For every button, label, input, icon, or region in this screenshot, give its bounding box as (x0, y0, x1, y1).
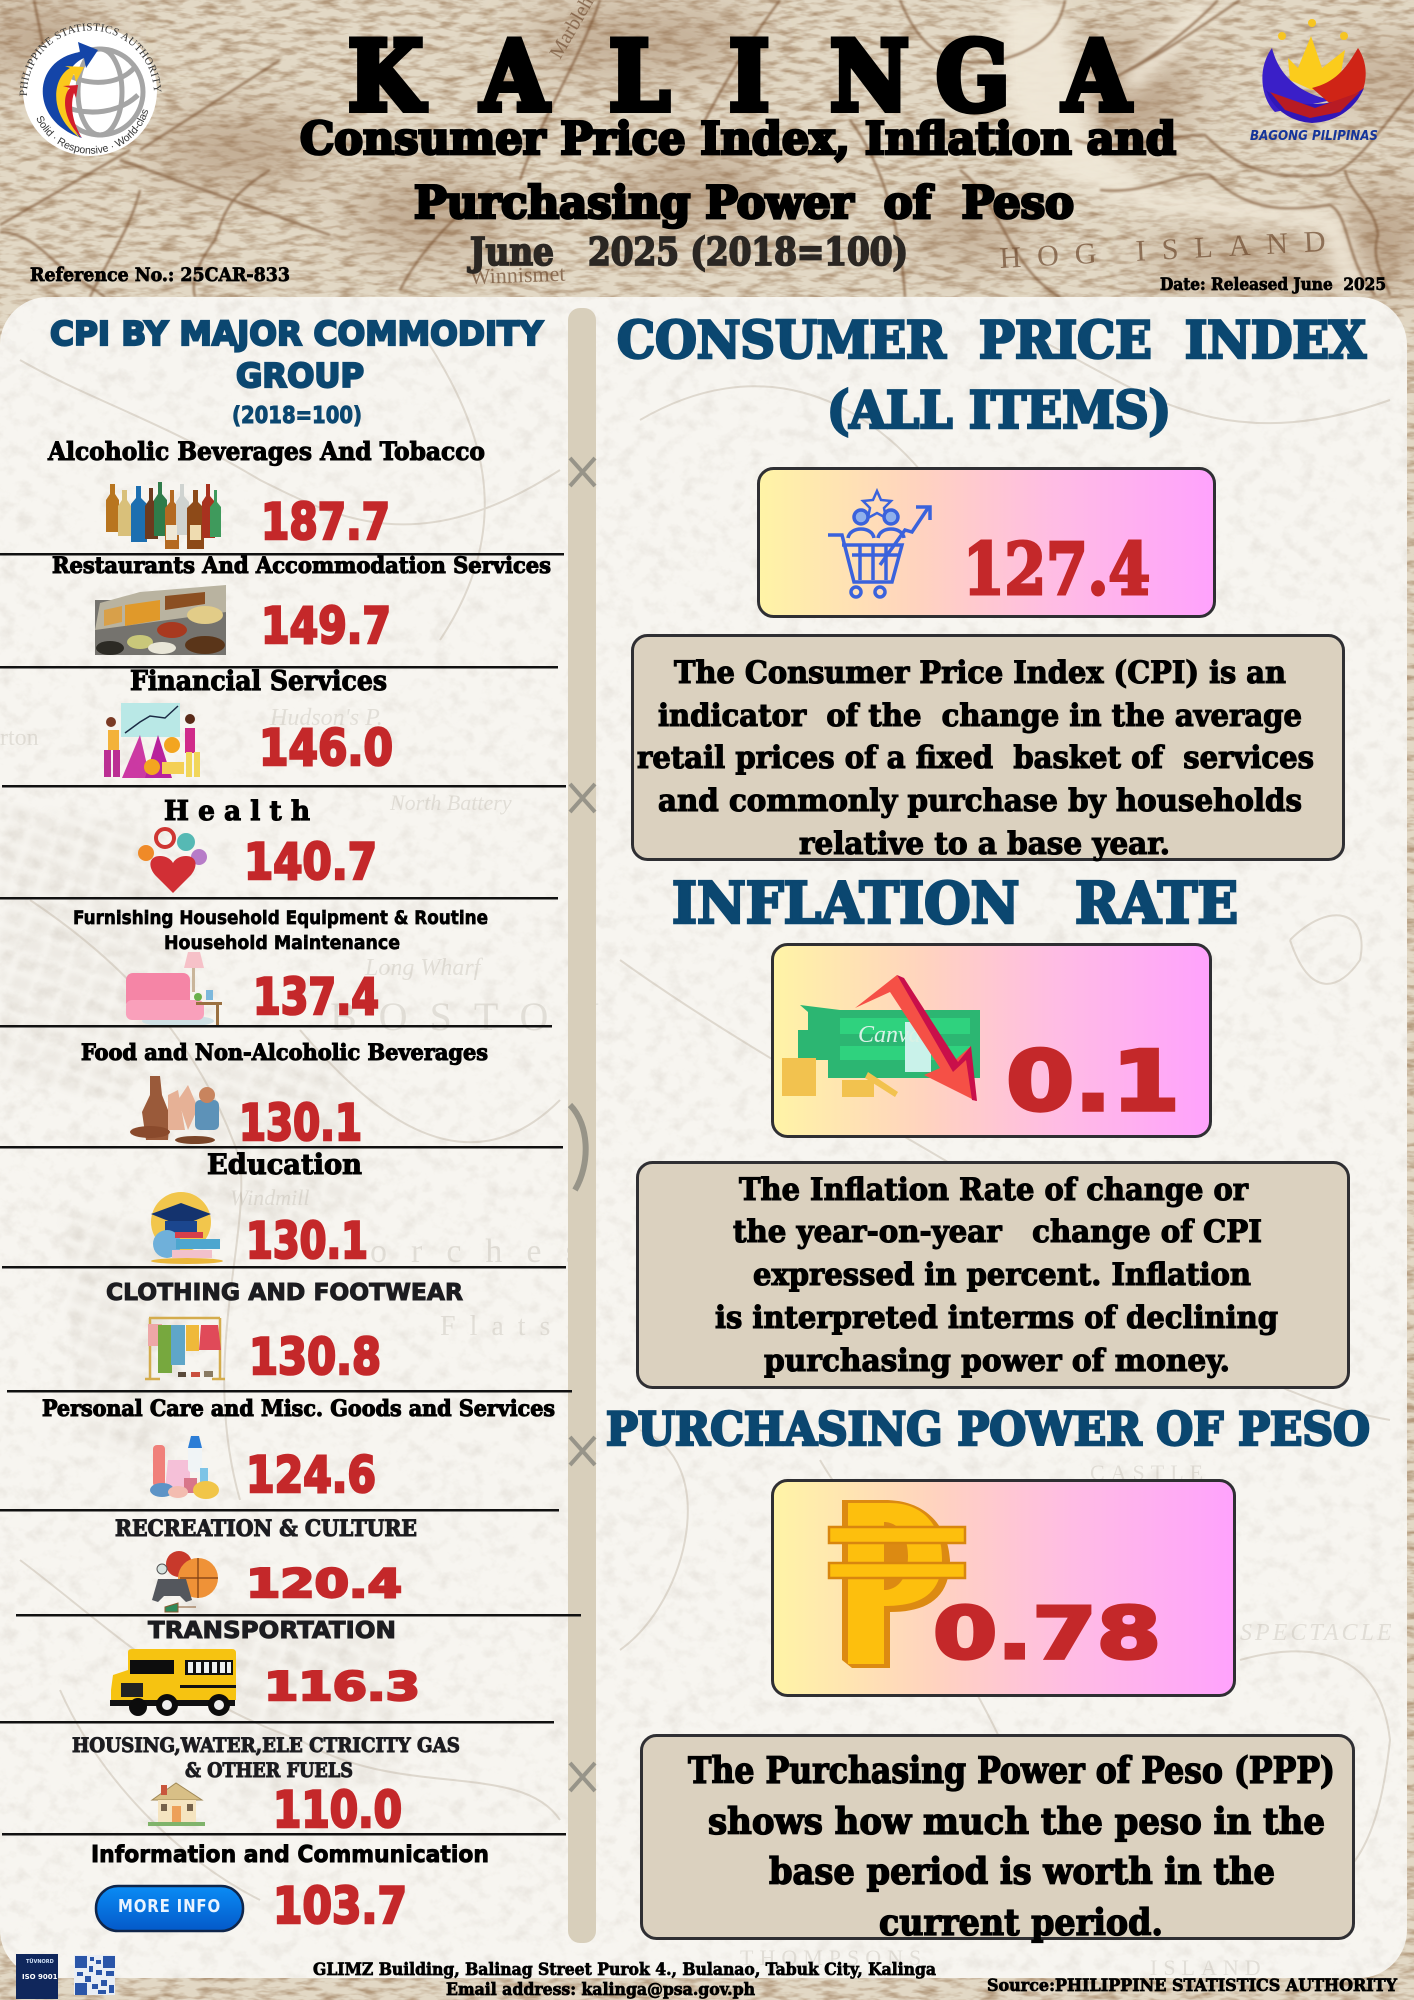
panel: consumer price index (617, 311, 1366, 862)
icon: shopping cart with rising arrow (828, 491, 930, 597)
panel: inflation rate (638, 870, 1348, 1388)
heading: CPI by commodity group: (2018=100) (232, 403, 362, 429)
row: furnishing household equipment: Furnishing Household Equipment & Routine (73, 907, 488, 929)
text box: inflation definition (638, 1162, 1348, 1388)
row: health (138, 796, 377, 893)
row: education: 130.1 (246, 1212, 368, 1270)
panel: white content sheet: Windmill (230, 1185, 309, 1210)
date line: June 2025: June 2025 (2018=100) (467, 229, 908, 274)
text box: PPP definition: shows how much the peso in the (708, 1801, 1325, 1843)
value card: CPI (758, 468, 1214, 616)
panel: white content sheet: North Battery (389, 790, 512, 815)
heading: CPI by commodity group: CPI BY MAJOR COMMODITY (50, 314, 544, 353)
row: health: H e a l t h (164, 796, 310, 827)
row: alcoholic beverages and tobacco: 187.7 (261, 493, 390, 551)
text box: CPI definition: relative to a base year. (799, 826, 1170, 862)
row: financial services: Financial Services (130, 666, 387, 697)
row: education (151, 1148, 368, 1270)
text box: CPI definition (632, 636, 1344, 862)
icon: graduation cap and books (151, 1192, 223, 1264)
text box: inflation definition: expressed in percent. Inflation (753, 1257, 1251, 1293)
row: furnishing household equipment: Household Maintenance (164, 932, 400, 954)
panel: CPI by major commodity group (0, 314, 581, 1935)
row: personal care and misc goods (42, 1396, 555, 1504)
footer: ISO badge: TÜVNORD (26, 1958, 54, 1965)
row: clothing and footwear (106, 1280, 463, 1386)
row: housing, water, electricity: 110.0 (273, 1781, 402, 1839)
panel: white content sheet: Flats (440, 1311, 564, 1342)
reference number: Reference No.: 25CAR-833 (30, 264, 290, 286)
row: housing, water, electricity (72, 1733, 460, 1839)
row: transportation: 116.3 (264, 1665, 420, 1710)
icon: clothing rack (145, 1318, 225, 1379)
row: alcoholic beverages and tobacco (47, 437, 485, 551)
text box: inflation definition: purchasing power of money. (764, 1343, 1230, 1379)
heading: purchasing power of peso: PURCHASING POWER OF PESO (606, 1402, 1370, 1456)
divider strip (568, 308, 596, 1943)
row: clothing and footwear: 130.8 (249, 1328, 381, 1386)
panel: white content sheet: BOSTON (330, 994, 621, 1039)
text box: PPP definition: The Purchasing Power of Peso (PPP) (688, 1750, 1335, 1792)
panel: white content sheet: ISLAND (1150, 1955, 1267, 1980)
row: personal care and misc goods: Personal Care and Misc. Goods and Services (42, 1396, 555, 1422)
icon: money with falling arrow: Canva (858, 1022, 921, 1048)
icon: finance people with chart (104, 703, 200, 778)
subtitle: Consumer Price Index, Inflation and Purchasing Power of Peso: Consumer Price Index, Inflation and (300, 112, 1176, 165)
icon: pink sofa (126, 952, 222, 1027)
button: more info (96, 1886, 243, 1931)
panel: white content sheet: Long Wharf (364, 955, 484, 981)
panel: white content sheet: Hudson's P. (269, 705, 383, 731)
icon: food and drink refusal (130, 1076, 219, 1144)
footer: address (313, 1960, 936, 2000)
heading: consumer price index (617, 311, 1366, 441)
row: recreation and culture: 120.4 (246, 1562, 402, 1607)
row: recreation and culture (115, 1516, 417, 1612)
heading: CPI by commodity group (50, 314, 544, 429)
row: restaurants and accommodation services: Restaurants And Accommodation Services (52, 553, 551, 579)
logo: Philippine Statistics Authority seal: PHILIPPINE STATISTICS AUTHORITY (20, 23, 162, 96)
subtitle: Consumer Price Index, Inflation and Purchasing Power of Peso (300, 112, 1176, 229)
text box: PPP definition: base period is worth in the (769, 1851, 1275, 1893)
row: housing, water, electricity: & OTHER FUELS (185, 1758, 353, 1782)
icon: gold peso sign (829, 1500, 965, 1668)
row: food and non-alcoholic beverages: 130.1 (239, 1094, 362, 1152)
footer: address: Email address: kalinga@psa.gov.ph (446, 1980, 755, 2000)
icon: yellow bus (110, 1649, 236, 1716)
panel: purchasing power of peso (606, 1402, 1370, 1944)
panel: white content sheet: CASTLE (1090, 1460, 1209, 1485)
heading: consumer price index: (ALL ITEMS) (827, 381, 1171, 441)
background: antique sepia map: Winnismet (469, 261, 566, 289)
panel: white content sheet: orches (370, 1233, 603, 1270)
subtitle: Consumer Price Index, Inflation and Purchasing Power of Peso: Purchasing Power of Peso (414, 176, 1074, 229)
icon: health heart (138, 829, 207, 893)
logo: Philippine Statistics Authority seal (20, 23, 162, 156)
title: KALINGA: KALINGA (348, 20, 1132, 133)
icon: food buffet (95, 585, 226, 655)
row: education: Education (207, 1148, 362, 1181)
row: information and communication (91, 1842, 489, 1935)
logo: Bagong Pilipinas (1250, 19, 1378, 144)
value card: peso: 0.78 (933, 1592, 1161, 1675)
icon: games and sports (152, 1551, 218, 1612)
text box: inflation definition: is interpreted interms of declining (715, 1300, 1278, 1336)
footer: QR code (74, 1955, 115, 1995)
row: transportation (110, 1618, 420, 1716)
text box: CPI definition: indicator of the change in the average (658, 698, 1302, 734)
text box: inflation definition: the year-on-year change of CPI (733, 1214, 1262, 1250)
row: restaurants and accommodation services (52, 553, 551, 655)
heading: inflation rate: INFLATION RATE (672, 870, 1238, 937)
footer: address: GLIMZ Building, Balinag Street Purok 4., Bulanao, Tabuk City, Kalinga (313, 1960, 936, 1980)
row: personal care and misc goods: 124.6 (246, 1446, 376, 1504)
row: furnishing household equipment: 137.4 (253, 968, 379, 1026)
button: more info: MORE INFO (118, 1896, 221, 1917)
icon: money with falling arrow (782, 975, 980, 1101)
row: transportation: TRANSPORTATION (148, 1618, 396, 1644)
text box: PPP definition (642, 1736, 1354, 1944)
text box: CPI definition: The Consumer Price Index (CPI) is an (674, 655, 1286, 691)
row: food and non-alcoholic beverages (81, 1040, 488, 1152)
row: financial services: 146.0 (259, 719, 393, 777)
logo: Bagong Pilipinas: BAGONG PILIPINAS (1250, 129, 1378, 144)
panel: white content sheet: SPECTACLE (1240, 1620, 1395, 1646)
text box: PPP definition: current period. (879, 1902, 1163, 1944)
row: information and communication: Information and Communication (91, 1842, 489, 1868)
row: health: 140.7 (244, 833, 377, 891)
text box: CPI definition: retail prices of a fixed basket of services (637, 740, 1314, 776)
row: recreation and culture: RECREATION & CULTURE (115, 1516, 417, 1542)
heading: consumer price index: CONSUMER PRICE INDEX (617, 311, 1366, 371)
footer: source: Source:PHILIPPINE STATISTICS AUTHORITY (987, 1976, 1398, 1996)
value card: inflation (772, 944, 1210, 1136)
row: housing, water, electricity: HOUSING,WATER,ELE CTRICITY GAS (72, 1733, 460, 1757)
row: furnishing household equipment (73, 907, 488, 1027)
row: alcoholic beverages and tobacco: Alcoholic Beverages And Tobacco (47, 437, 485, 466)
value card: peso (772, 1480, 1234, 1696)
icon: toiletries (150, 1436, 219, 1499)
icon: house (148, 1783, 205, 1826)
icon: bottles (106, 482, 221, 549)
row: clothing and footwear: CLOTHING AND FOOTWEAR (106, 1280, 463, 1306)
heading: CPI by commodity group: GROUP (236, 356, 364, 395)
background: antique sepia map: HOG ISLAND (999, 224, 1342, 275)
row: information and communication: 103.7 (273, 1877, 407, 1935)
panel: white content sheet: rton (0, 725, 39, 751)
text box: CPI definition: and commonly purchase by households (658, 783, 1302, 819)
value card: inflation: 0.1 (1006, 1033, 1180, 1130)
row: restaurants and accommodation services: 149.7 (261, 597, 391, 655)
row: food and non-alcoholic beverages: Food and Non-Alcoholic Beverages (81, 1040, 488, 1066)
text box: inflation definition: The Inflation Rate of change or (739, 1172, 1248, 1208)
row: financial services (104, 666, 393, 778)
footer: ISO badge: ISO 9001 (22, 1973, 58, 1981)
panel: white content sheet: THOMPSONS (740, 1945, 927, 1970)
release date: Date: Released June 2025 (1160, 275, 1386, 295)
footer: ISO badge (16, 1954, 58, 1999)
value card: CPI: 127.4 (963, 527, 1150, 611)
